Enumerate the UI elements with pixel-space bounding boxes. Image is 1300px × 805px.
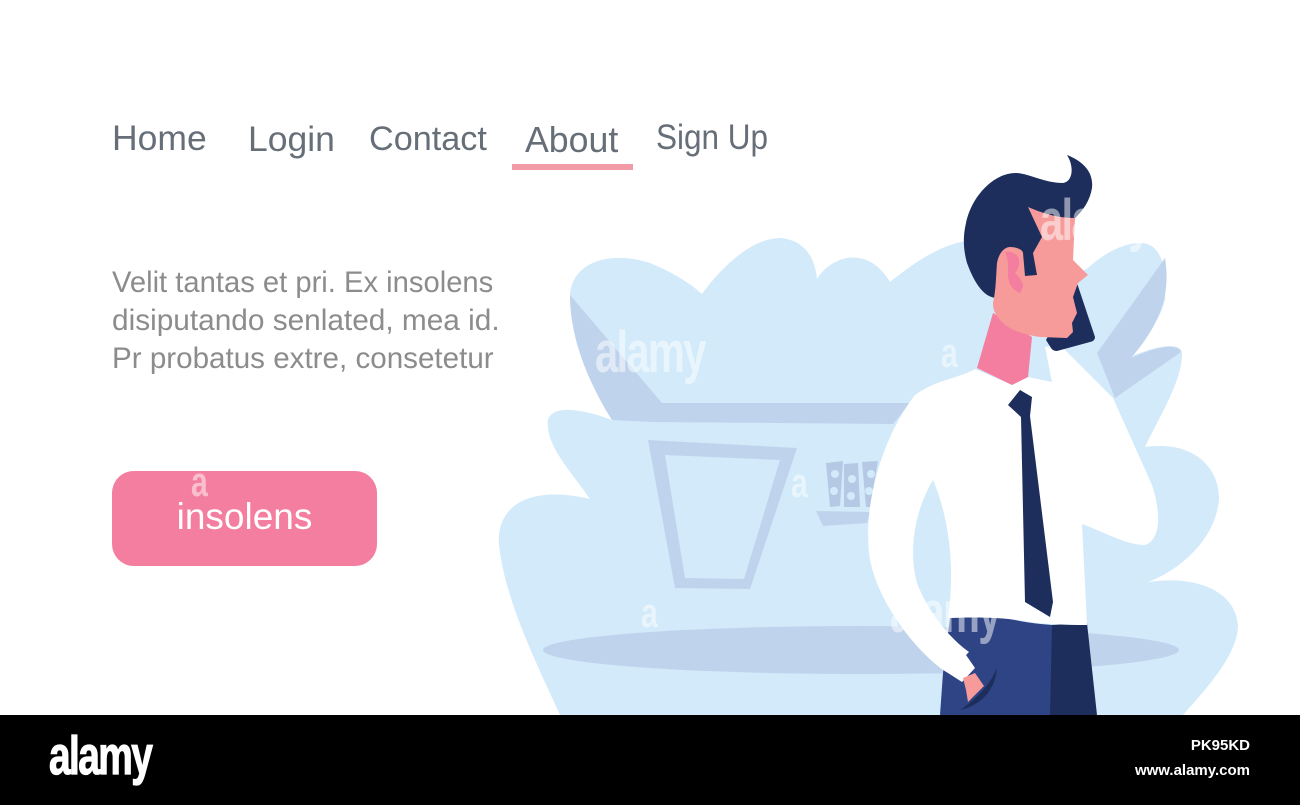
pocket bbox=[960, 668, 997, 710]
image id: PK95KD bbox=[1191, 737, 1250, 754]
button: insolens bbox=[177, 496, 312, 537]
cart tray bbox=[816, 511, 870, 526]
ear inner bbox=[1005, 252, 1023, 293]
watermarks: alamy bbox=[595, 319, 706, 385]
nav: Sign Up: Sign Up bbox=[656, 118, 768, 157]
footer bar bbox=[0, 715, 1300, 805]
watermarks: a bbox=[941, 329, 958, 376]
body text: disiputando senlated, mea id. bbox=[112, 304, 500, 337]
body text: Velit tantas et pri. Ex insolens bbox=[112, 267, 493, 299]
hair bbox=[964, 155, 1092, 310]
site url: www.alamy.com bbox=[1135, 762, 1250, 779]
footer logo: alamy bbox=[49, 726, 151, 786]
hand in pocket bbox=[963, 673, 984, 702]
nav: active underline bbox=[512, 164, 633, 170]
nav: Home: Home bbox=[112, 118, 207, 158]
phone bbox=[1046, 283, 1095, 351]
watermarks: a bbox=[191, 458, 208, 505]
nav: Contact: Contact bbox=[369, 120, 487, 158]
foliage shadow veins and cart bbox=[543, 258, 1181, 674]
cart boxes with dots bbox=[826, 461, 878, 507]
body text: Pr probatus extre, consetetur bbox=[112, 342, 494, 375]
nav: Login: Login bbox=[248, 119, 335, 159]
neck bbox=[977, 313, 1032, 385]
watermarks: alamy bbox=[890, 579, 1001, 645]
face bbox=[993, 207, 1088, 338]
watermarks: a bbox=[641, 589, 658, 636]
tie bbox=[1008, 390, 1053, 617]
nav: About: About bbox=[525, 120, 618, 160]
watermarks: a bbox=[791, 459, 808, 506]
watermarks: alamy bbox=[1040, 187, 1151, 253]
shirt bbox=[868, 345, 1158, 682]
trousers bbox=[940, 617, 1052, 715]
foliage background bbox=[499, 238, 1238, 715]
body text bbox=[112, 267, 500, 375]
button bbox=[112, 471, 377, 566]
cart basket bbox=[648, 440, 797, 589]
